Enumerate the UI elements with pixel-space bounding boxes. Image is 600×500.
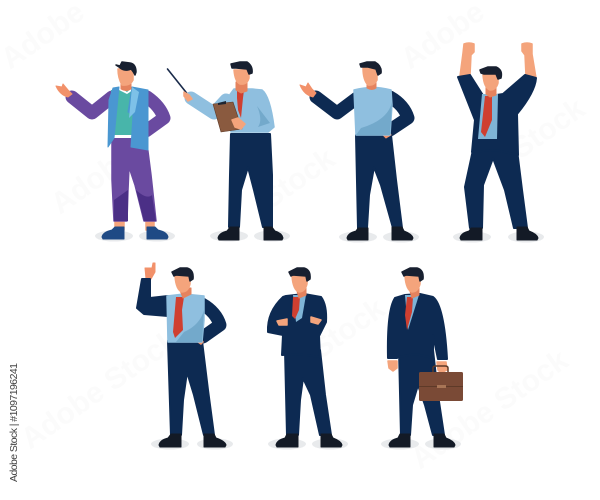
hair — [289, 268, 310, 281]
trousers — [112, 136, 156, 221]
floor shadows — [95, 230, 175, 242]
forearms and fists — [460, 43, 536, 78]
stock image id: Adobe Stock | #1097196241 — [8, 363, 20, 482]
floor shadows — [381, 438, 461, 450]
neck and face — [179, 288, 191, 298]
hands — [184, 92, 245, 129]
shoes — [159, 434, 226, 447]
figure 4: man cheering with raised fists — [453, 43, 544, 242]
tie — [173, 297, 184, 338]
floor shadows — [453, 232, 544, 242]
right arm — [146, 97, 164, 131]
neck and face — [409, 288, 419, 298]
trousers — [399, 350, 444, 435]
watermark pattern: Stock — [255, 142, 341, 216]
jacket with sleeves — [458, 75, 536, 155]
left sleeve — [191, 98, 226, 113]
pointer stick — [168, 69, 193, 101]
hands — [300, 83, 391, 138]
jacket — [268, 294, 326, 357]
watermark pattern: Stock — [305, 292, 391, 366]
raised hand — [145, 263, 155, 279]
trousers — [229, 134, 272, 227]
floor shadows — [210, 230, 290, 242]
hair — [172, 268, 193, 281]
neck and face — [486, 86, 496, 97]
shoes — [460, 227, 538, 240]
left arm — [72, 97, 112, 113]
tie — [292, 297, 300, 319]
floor shadows — [339, 232, 419, 242]
hip hand — [194, 337, 204, 345]
neck and head — [367, 82, 376, 90]
neck and head — [121, 82, 131, 90]
shoes — [218, 227, 283, 240]
shirt — [478, 94, 498, 139]
trousers — [168, 341, 214, 435]
blue vest — [108, 87, 119, 147]
tie — [405, 297, 413, 330]
shirt body — [226, 89, 274, 132]
trousers — [356, 135, 402, 228]
shoes — [102, 227, 168, 239]
figure 6: man with crossed arms — [268, 268, 348, 450]
crossed arm hands — [277, 317, 321, 325]
watermark pattern: Adobe Stock — [15, 323, 184, 456]
tie — [481, 96, 492, 137]
neck and face — [236, 82, 247, 93]
blue vest body — [354, 88, 392, 135]
hand — [56, 84, 72, 97]
raised arm — [137, 279, 168, 316]
watermark pattern: Stock — [505, 92, 591, 166]
hair — [480, 67, 501, 79]
blue vest — [167, 294, 204, 342]
hair — [231, 62, 252, 74]
teal shirt — [111, 90, 134, 135]
hands — [388, 361, 447, 373]
floor shadows — [151, 438, 233, 450]
figure 2: man with clipboard and pointer — [168, 62, 290, 242]
watermark pattern: Adobe Stock — [405, 343, 574, 476]
hair — [360, 62, 381, 75]
shoes — [347, 227, 413, 240]
arms — [316, 97, 357, 113]
neck and face — [296, 288, 306, 298]
briefcase — [419, 366, 463, 401]
shirt — [293, 295, 306, 322]
jacket — [388, 294, 447, 359]
hair — [116, 62, 136, 75]
figure 1: casual man presenting — [56, 62, 175, 242]
floor shadows — [268, 438, 348, 450]
shirt — [405, 295, 419, 330]
watermark pattern: Adobe — [45, 140, 140, 221]
white collar — [119, 87, 133, 94]
ankles — [115, 220, 154, 230]
shoes — [389, 434, 455, 447]
figure 7: man with briefcase — [381, 268, 463, 450]
right arm on hip — [202, 304, 220, 337]
shoes — [276, 434, 342, 447]
clipboard — [213, 102, 242, 132]
figure 3: man in vest with hand on hip — [300, 62, 419, 242]
tie — [237, 90, 244, 118]
trousers — [285, 350, 331, 435]
hair — [402, 268, 423, 281]
figure 5: man pointing up — [137, 263, 233, 450]
trousers — [465, 150, 527, 228]
